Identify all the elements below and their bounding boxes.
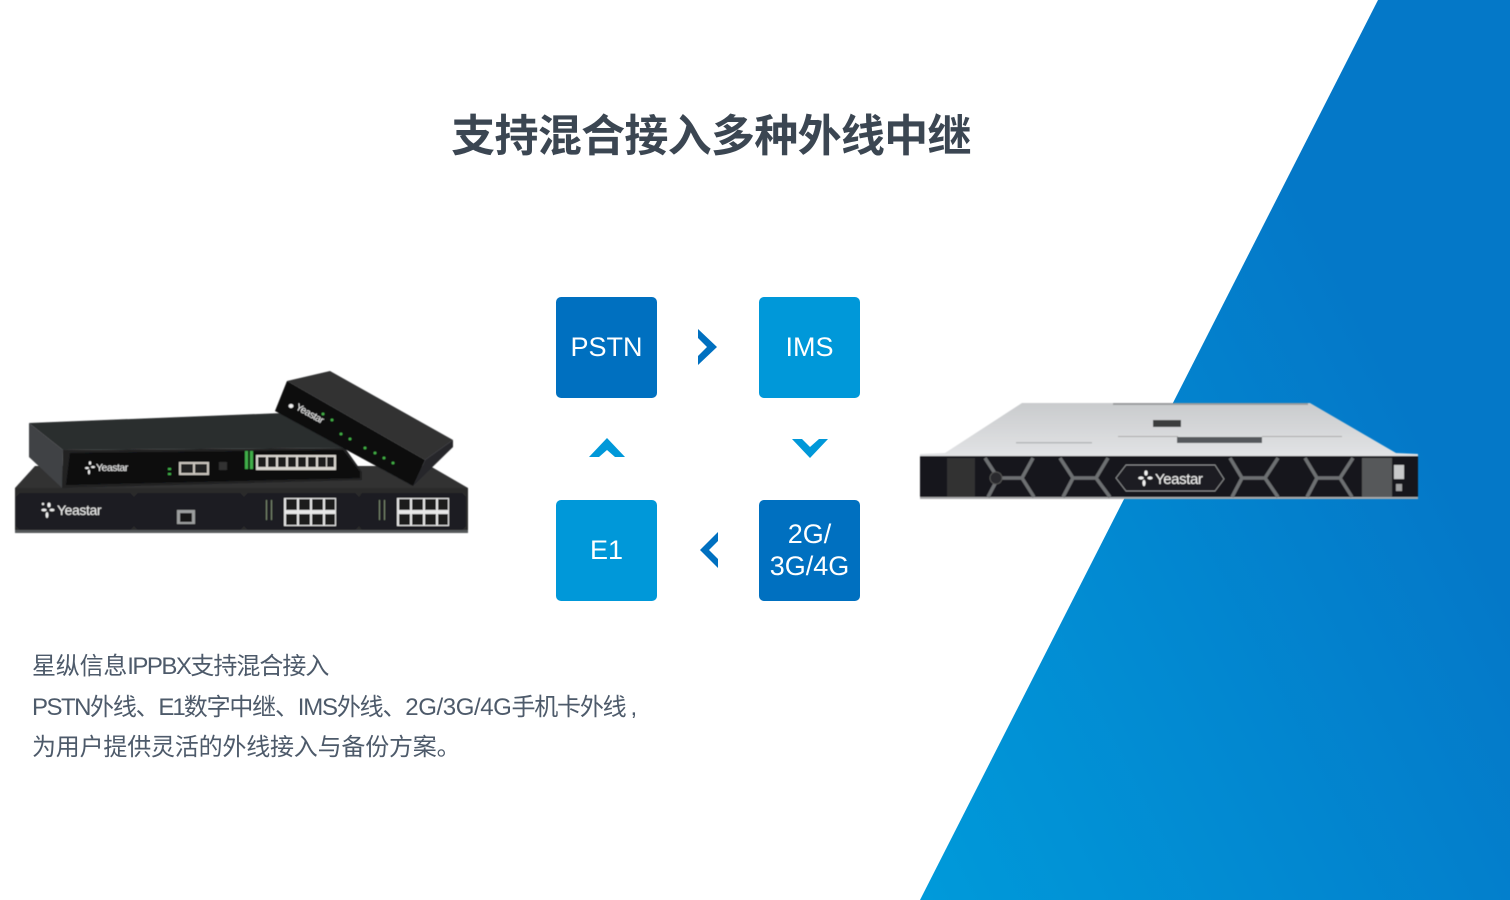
device: middle unit: Yeastar — [96, 462, 129, 474]
arrow: PSTN to IMS — [698, 329, 717, 365]
flow node: 2G/3G/4G: 2G/ — [788, 518, 831, 548]
title: 支持混合接入多种外线中继 — [451, 112, 971, 161]
device: middle unit — [29, 413, 362, 488]
flow node: PSTN: PSTN — [570, 332, 642, 362]
device: top small unit — [275, 371, 453, 486]
description text: 星纵信息IPPBX支持混合接入 — [32, 653, 328, 680]
flow node: 2G/3G/4G: 3G/4G — [770, 550, 849, 580]
icon: rack server — [919, 402, 1419, 500]
description text: PSTN外线、E1数字中继、IMS外线、2G/3G/4G手机卡外线, — [32, 694, 637, 720]
arrow: IMS to 2G/3G/4G — [792, 439, 828, 458]
flow node: E1 — [556, 500, 657, 601]
flow node: IMS — [759, 297, 860, 398]
description text: 为用户提供灵活的外线接入与备份方案。 — [32, 734, 460, 761]
flow node: IMS: IMS — [785, 332, 834, 362]
arrow: E1 to PSTN — [589, 438, 625, 457]
icon: rack server: Yeastar — [1155, 471, 1203, 488]
arrow: 2G/3G/4G to E1 — [700, 532, 718, 568]
flow node: E1: E1 — [590, 534, 623, 564]
flow node: PSTN — [556, 297, 657, 398]
device: bottom unit: Yeastar — [57, 502, 102, 518]
device: top small unit: Yeastar — [294, 402, 326, 427]
device: bottom unit — [15, 466, 468, 533]
icon: left hardware devices — [14, 370, 469, 534]
description text — [32, 653, 637, 761]
flow node: 2G/3G/4G — [759, 500, 860, 601]
